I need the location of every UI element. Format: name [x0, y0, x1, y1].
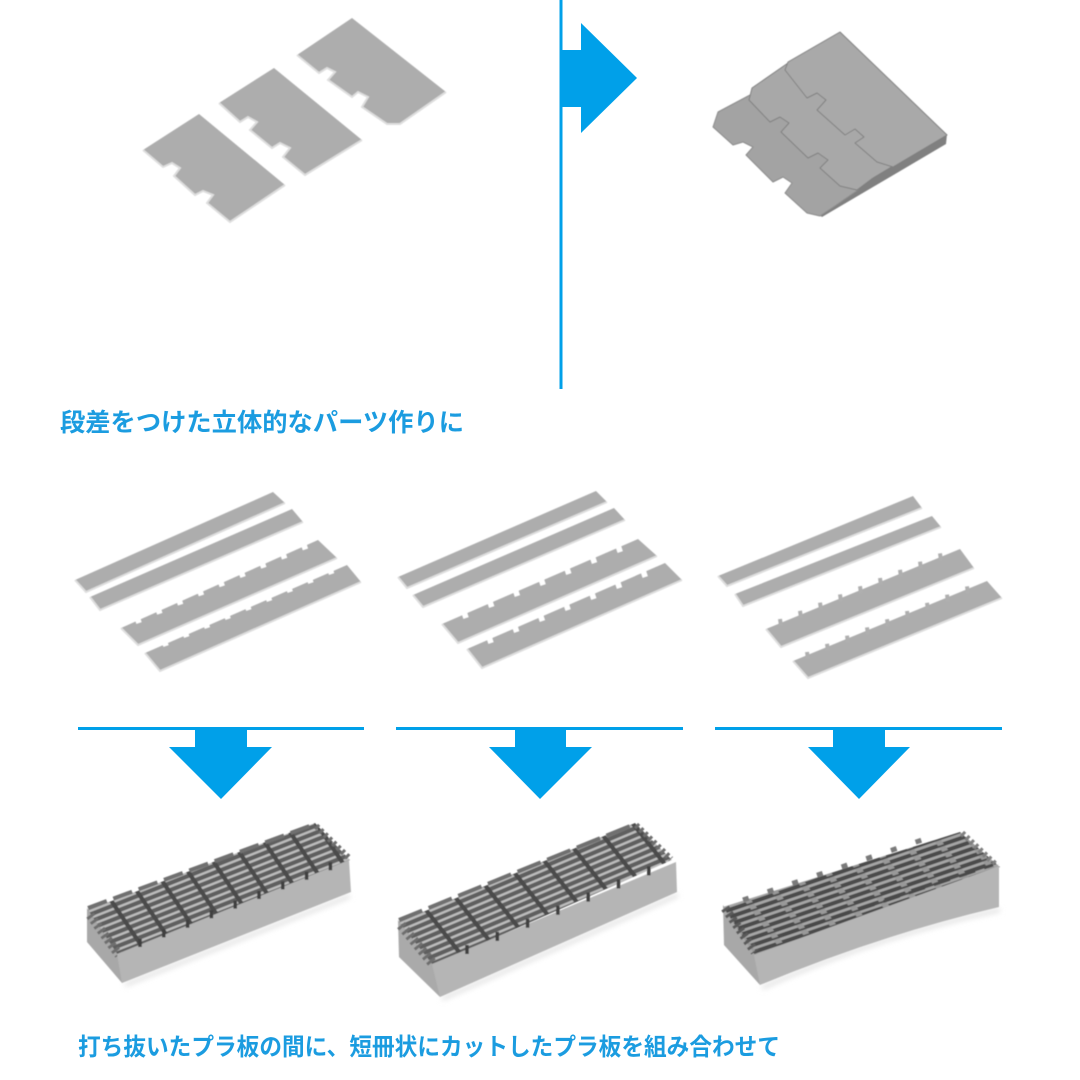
block top fins [88, 823, 350, 955]
divider line: column 1 [78, 727, 364, 730]
photo: strips set 3 [718, 496, 1002, 678]
strip: plain 2 [90, 509, 303, 610]
strip: plain 1 [75, 492, 285, 592]
block front notches [140, 862, 330, 947]
assembled side edge [818, 134, 947, 217]
block shadow [125, 896, 350, 985]
block left edge fins [90, 915, 119, 955]
photo: assembled block 2 [398, 823, 678, 999]
strip: notched 2 [467, 563, 682, 668]
block right edge fins [636, 825, 671, 859]
plate: left [143, 114, 285, 222]
arrow: right [560, 23, 637, 133]
photo: assembled block 3 [723, 832, 1000, 988]
strip: plain 2 [735, 516, 941, 606]
block end face [87, 908, 122, 983]
arrow: down 3 [808, 729, 910, 799]
photo: strips set 1 [75, 492, 361, 671]
block end face [723, 905, 760, 985]
block back edge bumps [743, 834, 940, 900]
photo: three separate stepped plastic plates [143, 18, 446, 222]
assembled middle plate [749, 63, 920, 190]
plate: right [297, 18, 446, 124]
strip: notched 1 [442, 539, 657, 643]
divider line: vertical [560, 0, 562, 389]
block front notches [467, 866, 649, 954]
strip: plain 1 [398, 491, 607, 588]
block front face [117, 860, 351, 983]
photo: assembled block 1 [87, 823, 351, 985]
divider line: column 2 [396, 727, 683, 730]
strip: tabbed 2 [793, 581, 1002, 678]
arrow: down 1 [169, 729, 272, 799]
heading: lower caption: 打ち抜いたプラ板の間に、短冊状にカットしたプラ板を組み合わせて [78, 1034, 780, 1061]
strip: tabbed 1 [766, 549, 974, 647]
heading: upper caption: 段差をつけた立体的なパーツ作りに [60, 409, 464, 437]
block top fins [723, 832, 1000, 955]
block top fins [399, 823, 672, 965]
strip: notched 2 [145, 565, 361, 671]
block shadow [442, 895, 678, 999]
block front slots [783, 865, 993, 935]
block right edge fins [316, 826, 349, 858]
assembled upper plate [785, 32, 947, 167]
block end face [398, 920, 440, 997]
strip: plain 1 [718, 496, 922, 586]
block front face [432, 862, 677, 997]
divider line: column 3 [715, 727, 1002, 730]
photo: assembled stepped plates [713, 32, 947, 217]
block shadow [762, 910, 1000, 988]
block right edge fins [962, 833, 997, 866]
block back edge fins [88, 824, 315, 908]
assembled lower plate [713, 95, 880, 216]
block back edge fins [399, 824, 635, 920]
plate: middle [219, 68, 362, 175]
strip: notched 1 [121, 540, 337, 645]
strip: plain 2 [413, 508, 625, 607]
block front face [754, 866, 999, 985]
block left edge fins [725, 908, 755, 952]
photo: strips set 2 [398, 491, 682, 668]
arrow: down 2 [489, 729, 592, 799]
block left edge fins [401, 925, 434, 965]
